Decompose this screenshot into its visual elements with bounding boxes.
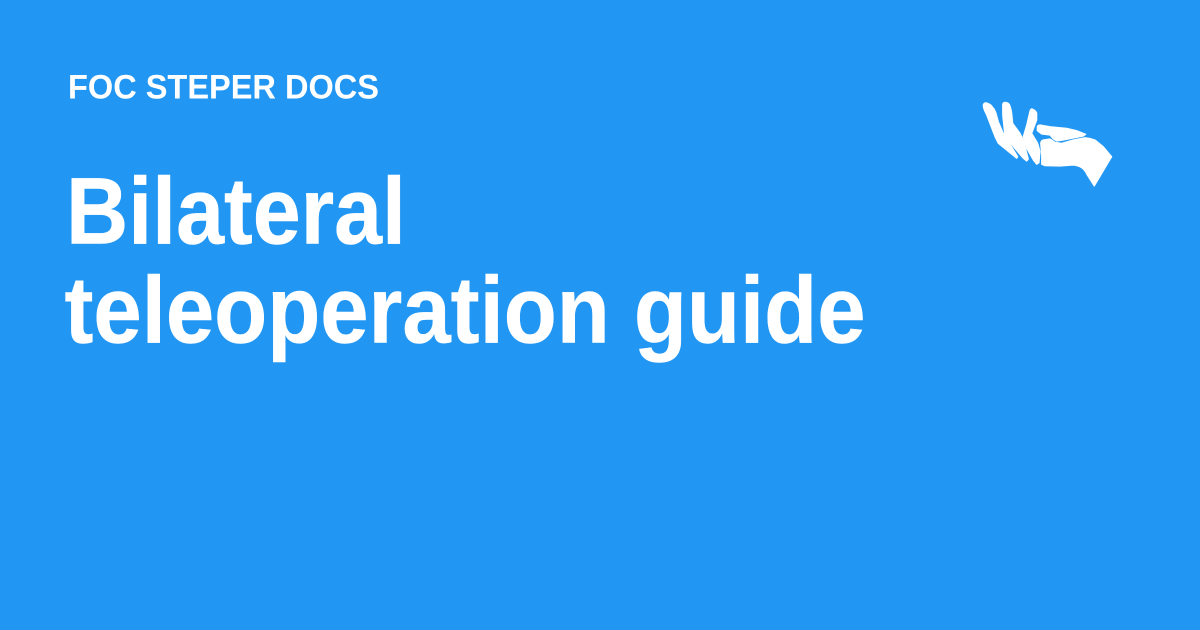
title: Bilateral — [66, 158, 406, 264]
title — [64, 158, 866, 364]
site name: FOC STEPER DOCS — [68, 68, 379, 106]
icon: hand logo — [973, 73, 1113, 213]
title: teleoperation guide — [64, 258, 866, 364]
